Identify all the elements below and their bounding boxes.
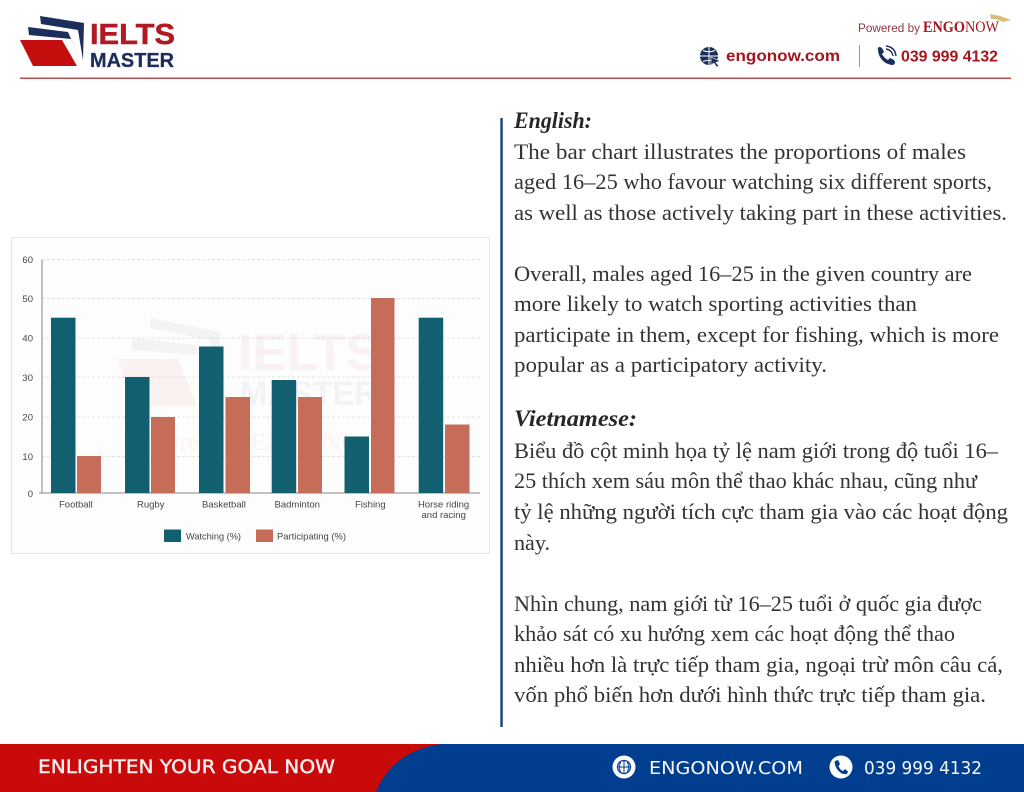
paragraph: Vietnamese introduction: tỷ lệ những người tích cực tham gia vào các hoạt động [514,499,1008,524]
paragraph: English overview: popular as a participatory activity. [514,352,827,377]
text block: Vietnamese [514,406,1008,707]
phone number: 039 999 4132 [901,48,998,66]
paragraph: English introduction [514,139,1007,225]
paragraph: English overview: Overall, males aged 16–25 in the given country are [514,261,972,286]
footer banner [0,744,1024,792]
watermark [117,318,384,456]
paragraph: English introduction: as well as those actively taking part in these activities. [514,200,1007,225]
bars: Horse riding and racing: and racing [422,510,466,521]
legend [164,530,346,542]
paragraph: Vietnamese overview: khảo sát có xu hướng xem các hoạt động thể thao [514,621,955,646]
footer website: ENGONOW.COM [649,758,803,779]
footer phone number: 039 999 4132 [864,758,982,779]
paragraph: English overview [514,261,999,377]
website: engonow.com [726,48,840,65]
bars: Rugby [125,377,175,510]
y axis labels: 50 [22,294,33,305]
watermark: IELTS [238,324,380,382]
logo: IELTS Master [20,16,175,72]
bars: Horse riding and racing [418,318,470,521]
bars: Fishing: Fishing [355,500,386,510]
y axis labels: 0 [28,489,33,500]
paragraph: English introduction: aged 16–25 who favour watching six different sports, [514,169,992,194]
grid lines and axes [39,260,480,493]
y axis labels: 60 [22,255,33,266]
bars: Football [51,318,101,510]
icon: phone [830,756,852,778]
paragraph: Vietnamese overview [514,591,1003,707]
paragraph: Vietnamese introduction: Biểu đồ cột minh họa tỷ lệ nam giới trong độ tuổi 16– [514,438,999,463]
bars: Fishing [344,298,394,510]
paragraph: Vietnamese overview: nhiều hơn là trực tiếp tham gia, ngoại trừ môn câu cá, [514,652,1003,677]
header [20,14,1011,79]
paragraph: Vietnamese overview: Nhìn chung, nam giới từ 16–25 tuổi ở quốc gia được [514,591,982,616]
separator [859,45,860,67]
bars: Basketball: Basketball [202,500,246,510]
y axis labels: 30 [22,373,33,384]
paragraph: Vietnamese introduction: này. [514,530,550,555]
paragraph: English introduction: The bar chart illustrates the proportions of males [514,139,966,164]
watermark: MASTER [240,375,378,413]
y axis labels [22,255,33,500]
icon: globe [612,756,636,778]
legend: Watching (%) [186,532,241,542]
vertical divider [500,118,503,727]
bars: Football: Football [59,500,93,510]
icon: globe with cursor [700,47,720,67]
slogan: ENLIGHTEN YOUR GOAL NOW [38,756,335,778]
bars: Horse riding and racing: Horse riding [418,500,469,510]
bars: Rugby: Rugby [137,500,165,510]
logo: IELTS Master: IELTS [90,19,175,51]
powered by Engonow [858,14,1011,36]
paragraph: Vietnamese overview: vốn phổ biến hơn dưới hình thức trực tiếp tham gia. [514,682,986,707]
text block: English [513,108,1007,377]
paragraph: English overview: participate in them, except for fishing, which is more [514,322,999,347]
legend: Participating (%) [277,532,346,542]
icon: phone [878,46,896,65]
y axis labels: 10 [22,452,33,463]
y axis labels: 20 [22,412,33,424]
paragraph: English overview: more likely to watch sporting activities than [514,291,917,316]
bars: Basketball [199,346,250,510]
paragraph: Vietnamese introduction [514,438,1008,555]
bars: Badminton [272,380,322,510]
heading: Vietnamese: Vietnamese: [514,406,637,431]
paragraph: Vietnamese introduction: 25 thích xem sáu môn thể thao khác nhau, cũng như [514,468,978,493]
bars: Badminton: Badminton [274,500,320,510]
powered by Engonow: ENGONOW [923,19,1000,36]
y axis labels: 40 [22,334,33,344]
logo: IELTS Master: MASTER [90,49,174,72]
powered by Engonow: Powered by [858,23,920,35]
watermark: Powered by ENGONOW [122,430,384,456]
heading: English: English: [513,108,592,133]
panel: bar chart [12,238,490,554]
